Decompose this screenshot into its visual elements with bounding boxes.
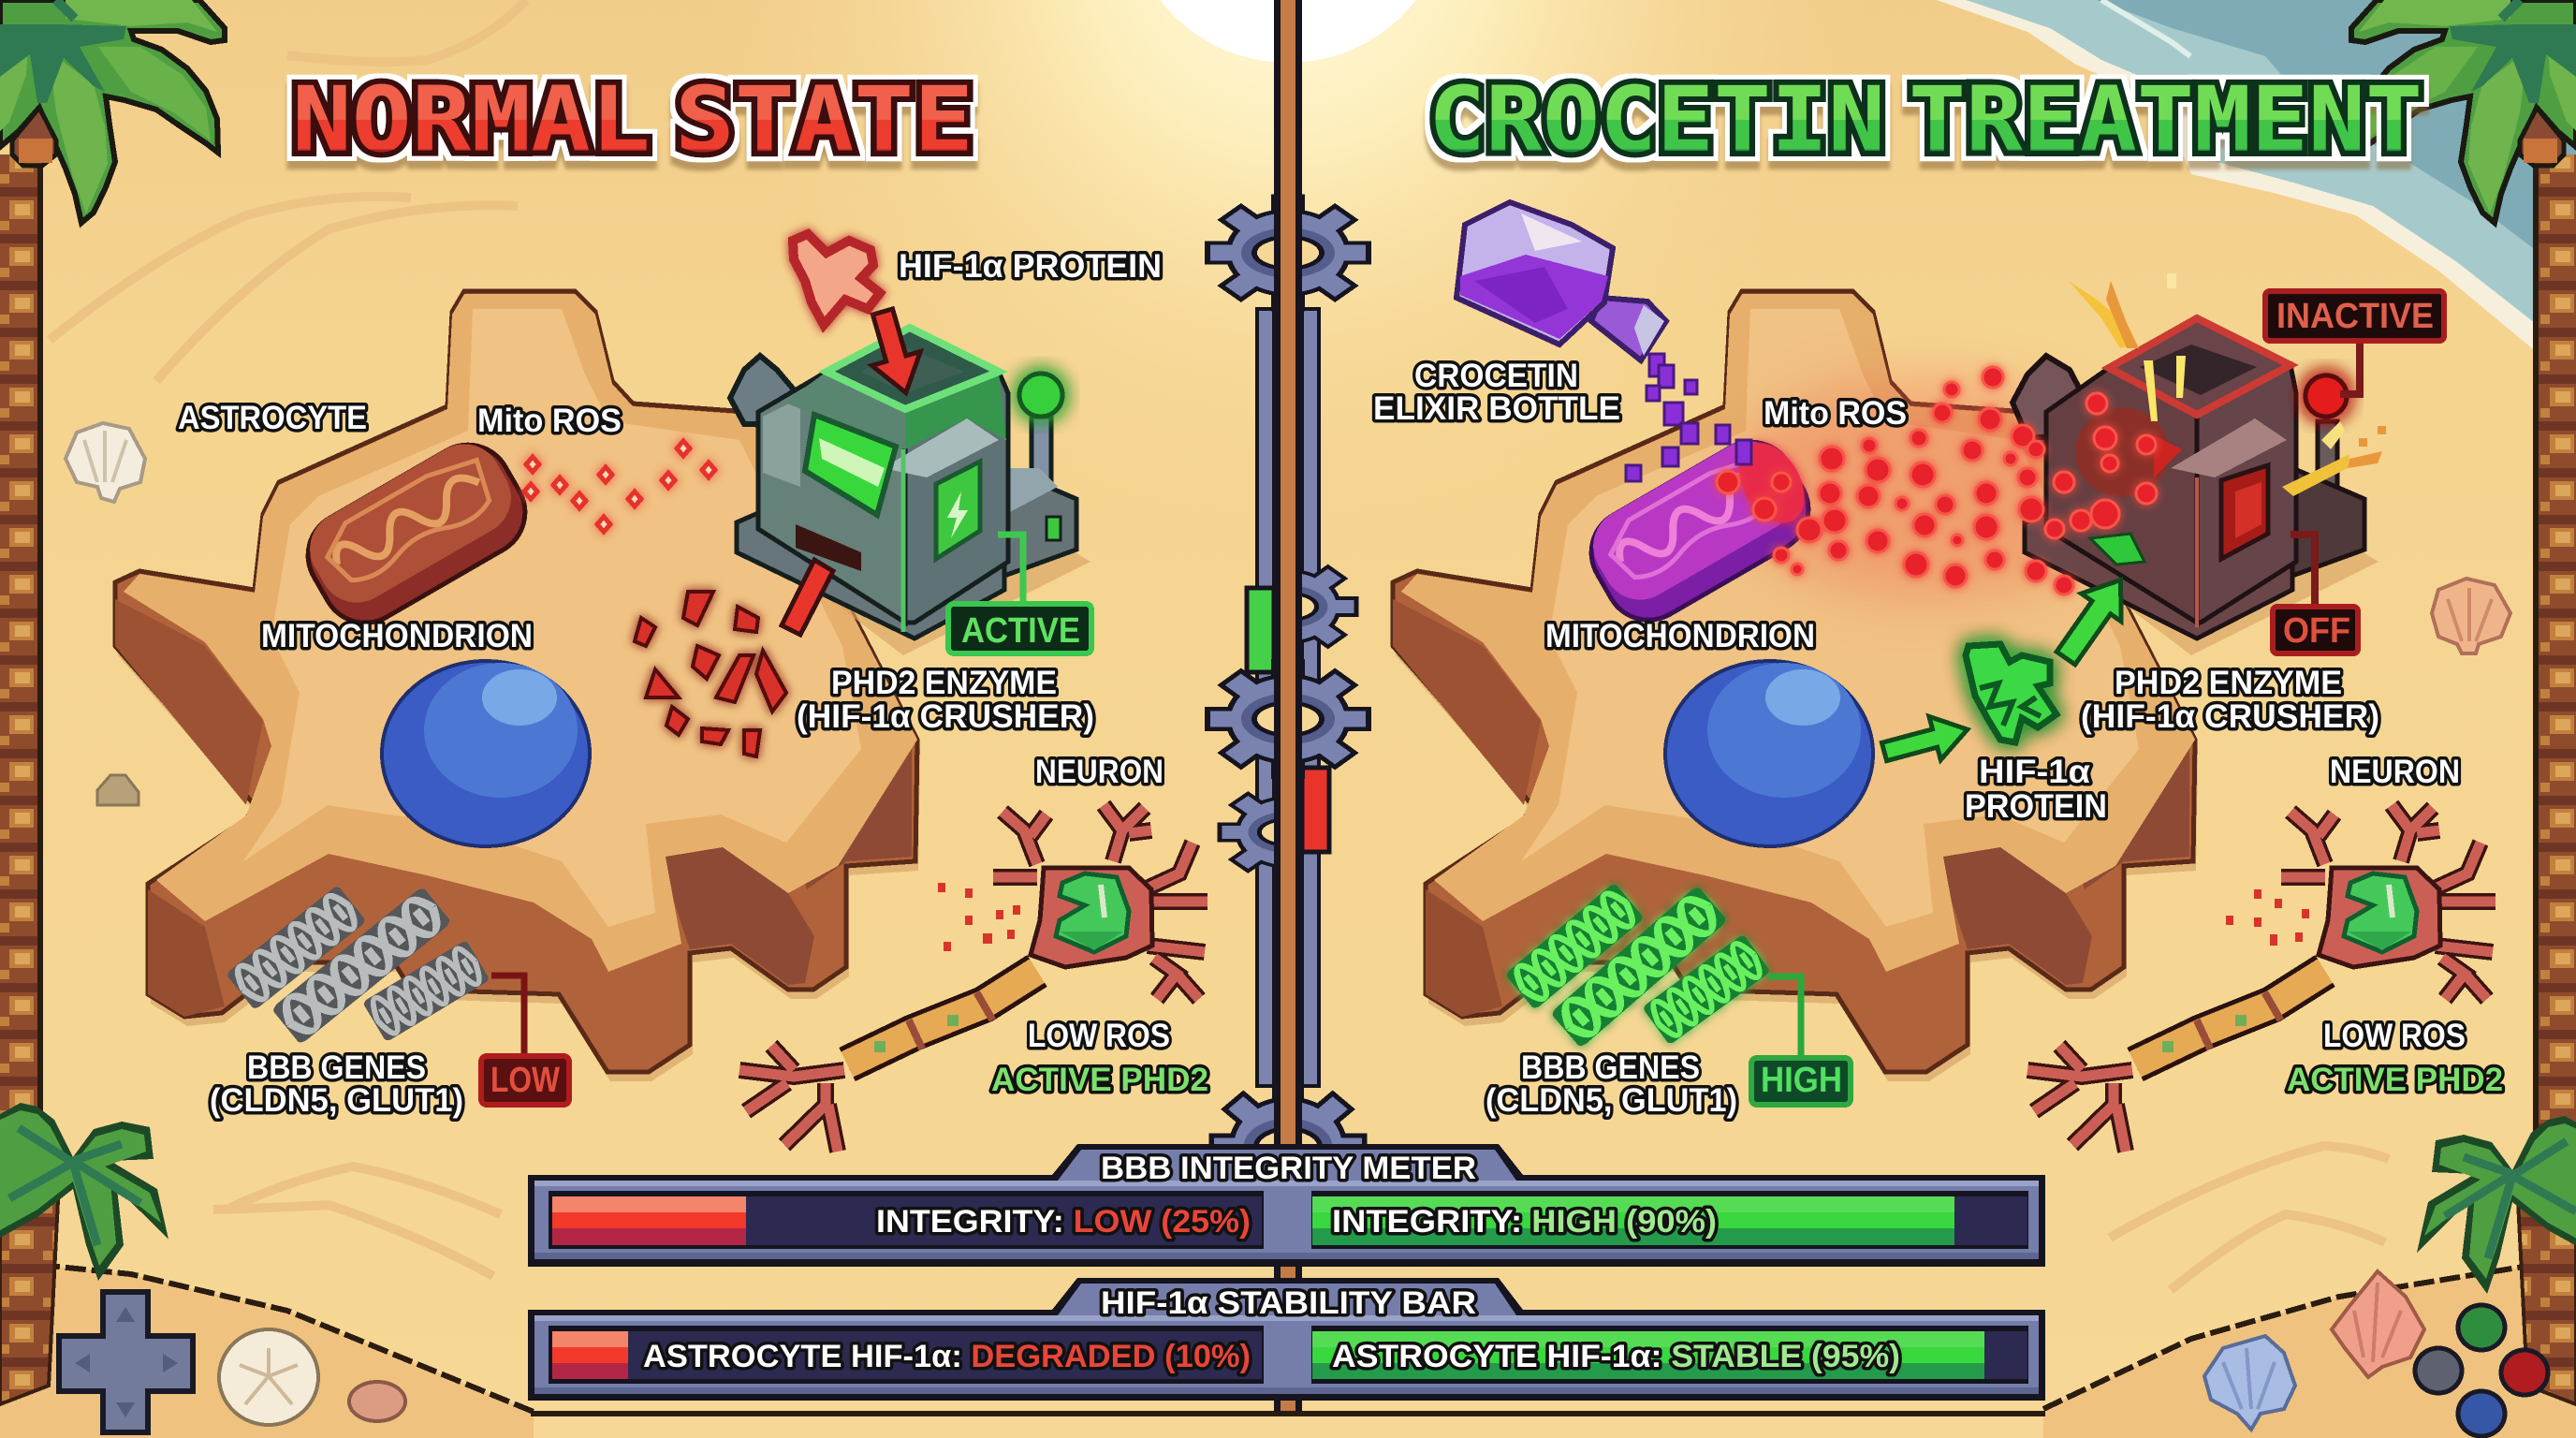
ROS haze right [1732, 374, 2125, 599]
off badge: OFF [2283, 611, 2350, 651]
frame line right [2533, 150, 2539, 1273]
label: crocetin elixir bottle [1373, 358, 1620, 427]
gear 1 [1208, 197, 1368, 309]
sun [1126, 0, 1450, 63]
high fill [1312, 1196, 1954, 1245]
arrow of fragments out [782, 560, 833, 635]
active badge: ACTIVE [961, 611, 1080, 651]
label: crocetin elixir bottle: CROCETIN [1414, 358, 1578, 394]
mito ROS left [524, 441, 715, 532]
astrocyte right [1393, 291, 2198, 1081]
label: PHD2 enzyme left: PHD2 ENZYME [831, 665, 1057, 701]
shell: white left [66, 423, 145, 502]
label: mito ROS right: Mito ROS [1764, 395, 1907, 432]
label: neuron left: NEURON [1035, 754, 1164, 790]
shell: blue [2204, 1336, 2295, 1430]
high connector [1768, 976, 1801, 1056]
lever [1032, 417, 1051, 487]
panel: HIF-1a stability bar [528, 1278, 2045, 1401]
title: normal state: NORMAL STATE [292, 67, 973, 172]
mitochondrion left [291, 428, 541, 638]
bottom rail [531, 1411, 2045, 1416]
low badge: LOW [490, 1061, 560, 1100]
frame line left [37, 150, 43, 1273]
DNA genes right [1505, 883, 1771, 1049]
palm crown bottom left [0, 1103, 168, 1281]
ocean [1937, 0, 2576, 374]
palm trunk bottom left [0, 1200, 58, 1404]
stability heading: HIF-1α STABILITY BAR [1101, 1285, 1476, 1321]
gear 5 [1209, 1088, 1367, 1144]
reading high: INTEGRITY: HIGH (90%) [1332, 1204, 1717, 1240]
label: HIF-1a protein: HIF-1α PROTEIN [899, 248, 1162, 285]
arrow to crusher [2046, 566, 2141, 672]
beach border right [2043, 1265, 2535, 1409]
label: HIF-1a crusher left: (HIF-1α CRUSHER) [797, 698, 1094, 735]
lever right [2318, 421, 2337, 487]
label: mitochondrion left: MITOCHONDRION [261, 618, 533, 654]
high badge: HIGH [1761, 1061, 1842, 1100]
label: HIF-1a protein right [1965, 754, 2107, 825]
broken chamber [2075, 407, 2169, 497]
label: mitochondrion right: MITOCHONDRION [1545, 618, 1815, 654]
enzyme machine left [730, 328, 1090, 655]
low connector [491, 976, 524, 1054]
DNA genes left [226, 885, 490, 1045]
label: low ROS left: LOW ROS [1028, 1018, 1170, 1054]
sparks side [2282, 421, 2386, 496]
beach foreground right [2043, 1265, 2576, 1438]
pebble [97, 775, 139, 805]
palm crown top right [2351, 0, 2576, 223]
label: BBB genes right: BBB GENES [1521, 1049, 1700, 1086]
label: CLDN5 GLUT1 left: (CLDN5, GLUT1) [210, 1082, 463, 1119]
lever knob [1019, 374, 1062, 417]
enzyme machine right [2012, 318, 2378, 655]
gear 2 [1302, 564, 1359, 650]
low badge [481, 1056, 569, 1105]
green window [805, 415, 896, 515]
HIF-1a protein right [1966, 644, 2056, 742]
beach foreground left [0, 1265, 534, 1438]
title: crocetin treatment: CROCETIN TREATMENT [1428, 67, 2422, 172]
astrocyte left [115, 291, 920, 1081]
neuron ROS dots left [938, 883, 1020, 951]
label: PHD2 enzyme right: PHD2 ENZYME [2115, 665, 2342, 701]
arrow into crusher [858, 305, 930, 400]
d-pad [59, 1292, 193, 1432]
lodged protein [2090, 534, 2144, 565]
HIF-1a protein left [793, 234, 880, 325]
label: HIF-1a crusher right: (HIF-1α CRUSHER) [2081, 698, 2379, 735]
label: CLDN5 GLUT1 right: (CLDN5, GLUT1) [1486, 1082, 1737, 1119]
active connector [998, 535, 1023, 603]
label: low ROS right: LOW ROS [2323, 1018, 2466, 1054]
shell: pink [2332, 1271, 2424, 1377]
label: BBB genes left: BBB GENES [247, 1049, 426, 1086]
reading degraded: ASTROCYTE HIF-1α: DEGRADED (10%) [643, 1339, 1251, 1374]
neuron ROS dots right [2226, 889, 2309, 946]
side cog [730, 356, 793, 424]
label: astrocyte: ASTROCYTE [178, 400, 367, 436]
sparks top [2069, 273, 2186, 421]
palm crown top left [0, 0, 225, 223]
label: active PHD2 right: ACTIVE PHD2 [2287, 1062, 2503, 1098]
red panel [2221, 465, 2268, 559]
reading stable: ASTROCYTE HIF-1α: STABLE (95%) [1332, 1339, 1900, 1374]
neuron right [2027, 805, 2496, 1152]
arrow from nucleus [1879, 708, 1973, 773]
small shell [349, 1382, 405, 1421]
label: HIF-1a protein right: HIF-1α [1979, 754, 2091, 790]
off connector [2291, 535, 2315, 605]
inactive connector [2340, 342, 2360, 394]
controller buttons [2415, 1305, 2548, 1436]
palm trunk top right [2539, 154, 2576, 1137]
gear 4 [1217, 791, 1274, 873]
inactive badge: INACTIVE [2276, 297, 2434, 336]
stable fill [1312, 1331, 1984, 1379]
center divider [1208, 0, 1368, 1414]
sand dollar [219, 1329, 318, 1425]
beach border left [39, 1265, 534, 1412]
elixir bottle [1456, 202, 1666, 360]
power panel [936, 462, 980, 559]
palm trunk top left [0, 154, 37, 1137]
indicator: green [1247, 588, 1274, 672]
palm trunk bottom right [2518, 1200, 2576, 1404]
red knob [2305, 375, 2347, 417]
degraded fragments [635, 592, 786, 756]
label: mito ROS left: Mito ROS [477, 403, 622, 439]
neuron left [739, 805, 1208, 1152]
nucleus left [382, 661, 590, 846]
nucleus right [1665, 661, 1873, 846]
palm crown bottom right [2417, 1116, 2576, 1294]
label: active PHD2 left: ACTIVE PHD2 [991, 1062, 1208, 1098]
indicator: red [1302, 768, 1329, 852]
purple drops [1626, 354, 1751, 481]
sun glow [655, 0, 1928, 562]
label: neuron right: NEURON [2330, 754, 2460, 790]
label: crocetin elixir bottle: ELIXIR BOTTLE [1373, 390, 1620, 427]
side cog right [2012, 356, 2082, 437]
reading low: INTEGRITY: LOW (25%) [876, 1204, 1251, 1240]
label: HIF-1a protein right: PROTEIN [1965, 788, 2107, 825]
degraded fill [552, 1331, 628, 1379]
mito ROS cloud right [1717, 367, 2157, 594]
panel: BBB integrity meter [528, 1144, 2045, 1267]
shell: salmon right [2432, 579, 2510, 653]
mitochondrion right [1574, 423, 1827, 636]
meter heading: BBB INTEGRITY METER [1101, 1151, 1476, 1186]
gear 3 [1208, 661, 1368, 777]
low fill [552, 1196, 746, 1245]
